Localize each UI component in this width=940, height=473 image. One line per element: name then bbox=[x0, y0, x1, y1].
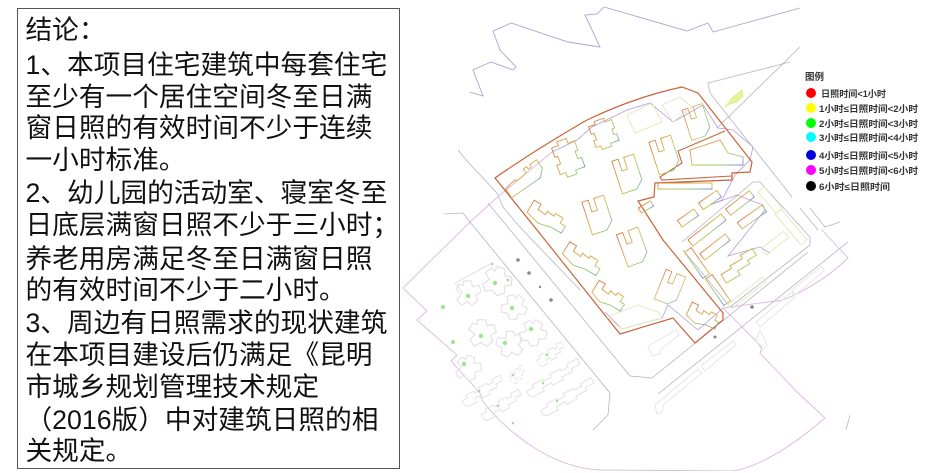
text block: conclusion 1: 窗日照的有效时间不少于连续 bbox=[26, 113, 372, 143]
text block: conclusion 3: 关规定。 bbox=[26, 436, 132, 466]
text block: conclusion 2: 日底层满窗日照不少于三小时； bbox=[26, 210, 399, 240]
small dark marks bbox=[516, 258, 754, 338]
legend item: 1 to 2 hours: 1小时≤日照时间<2小时 bbox=[819, 103, 918, 114]
legend item: 3 to 4 hours: 3小时≤日照时间<4小时 bbox=[819, 132, 918, 143]
yellow-green spot bbox=[725, 90, 743, 107]
text block: conclusion 3 bbox=[26, 308, 387, 466]
text block: conclusion 2: 2、幼儿园的活动室、寝室冬至 bbox=[26, 178, 387, 208]
legend item: 2 to 3 hours: 2小时≤日照时间<3小时 bbox=[819, 118, 918, 129]
text block: conclusion 1: 一小时标准。 bbox=[26, 145, 186, 175]
legend item: 4 to 5 hours: 4小时≤日照时间<5小时 bbox=[819, 150, 918, 161]
legend title: 图例 bbox=[805, 71, 824, 83]
red inner notch bbox=[660, 131, 732, 180]
red project boundary bbox=[495, 87, 752, 343]
green sunlight points bbox=[441, 263, 558, 424]
legend item: under 1 hour: 日照时间<1小时 bbox=[821, 88, 886, 99]
pale existing towers south-west bbox=[453, 263, 551, 383]
panel: conclusions bbox=[17, 8, 400, 469]
text block: conclusion 3: 在本项目建设后仍满足《昆明 bbox=[26, 340, 372, 370]
outer site boundary north bbox=[470, 7, 800, 96]
text block: conclusion 1 bbox=[26, 50, 387, 175]
residential buildings bbox=[502, 104, 767, 332]
pale stepped slab buildings bbox=[460, 342, 597, 422]
text block: conclusion 3: 市城乡规划管理技术规定 bbox=[26, 372, 319, 402]
text block: conclusion 2 bbox=[26, 178, 399, 305]
heading: conclusions: 结论： bbox=[26, 15, 106, 45]
legend item: 6 hours or more: 6小时≤日照时间 bbox=[819, 181, 890, 192]
outer pink boundary bbox=[403, 152, 848, 471]
legend bbox=[805, 71, 918, 192]
text block: conclusion 3: （2016版）中对建筑日照的相 bbox=[26, 405, 378, 435]
legend item: 5 to 6 hours: 5小时≤日照时间<6小时 bbox=[819, 165, 918, 176]
pale north buildings bbox=[607, 97, 807, 329]
text block: conclusion 3: 3、周边有日照需求的现状建筑 bbox=[26, 308, 387, 338]
site plan bbox=[403, 7, 850, 471]
text block: conclusion 1: 1、本项目住宅建筑中每套住宅 bbox=[26, 50, 387, 80]
text block: conclusion 2: 的有效时间不少于二小时。 bbox=[26, 275, 346, 305]
pale slabs south-east bbox=[648, 266, 824, 414]
text block: conclusion 2: 养老用房满足冬至日满窗日照 bbox=[26, 244, 372, 274]
purple sunlight limit line bbox=[552, 103, 770, 330]
road lines bbox=[444, 47, 850, 430]
text block: conclusion 1: 至少有一个居住空间冬至日满 bbox=[26, 82, 372, 112]
